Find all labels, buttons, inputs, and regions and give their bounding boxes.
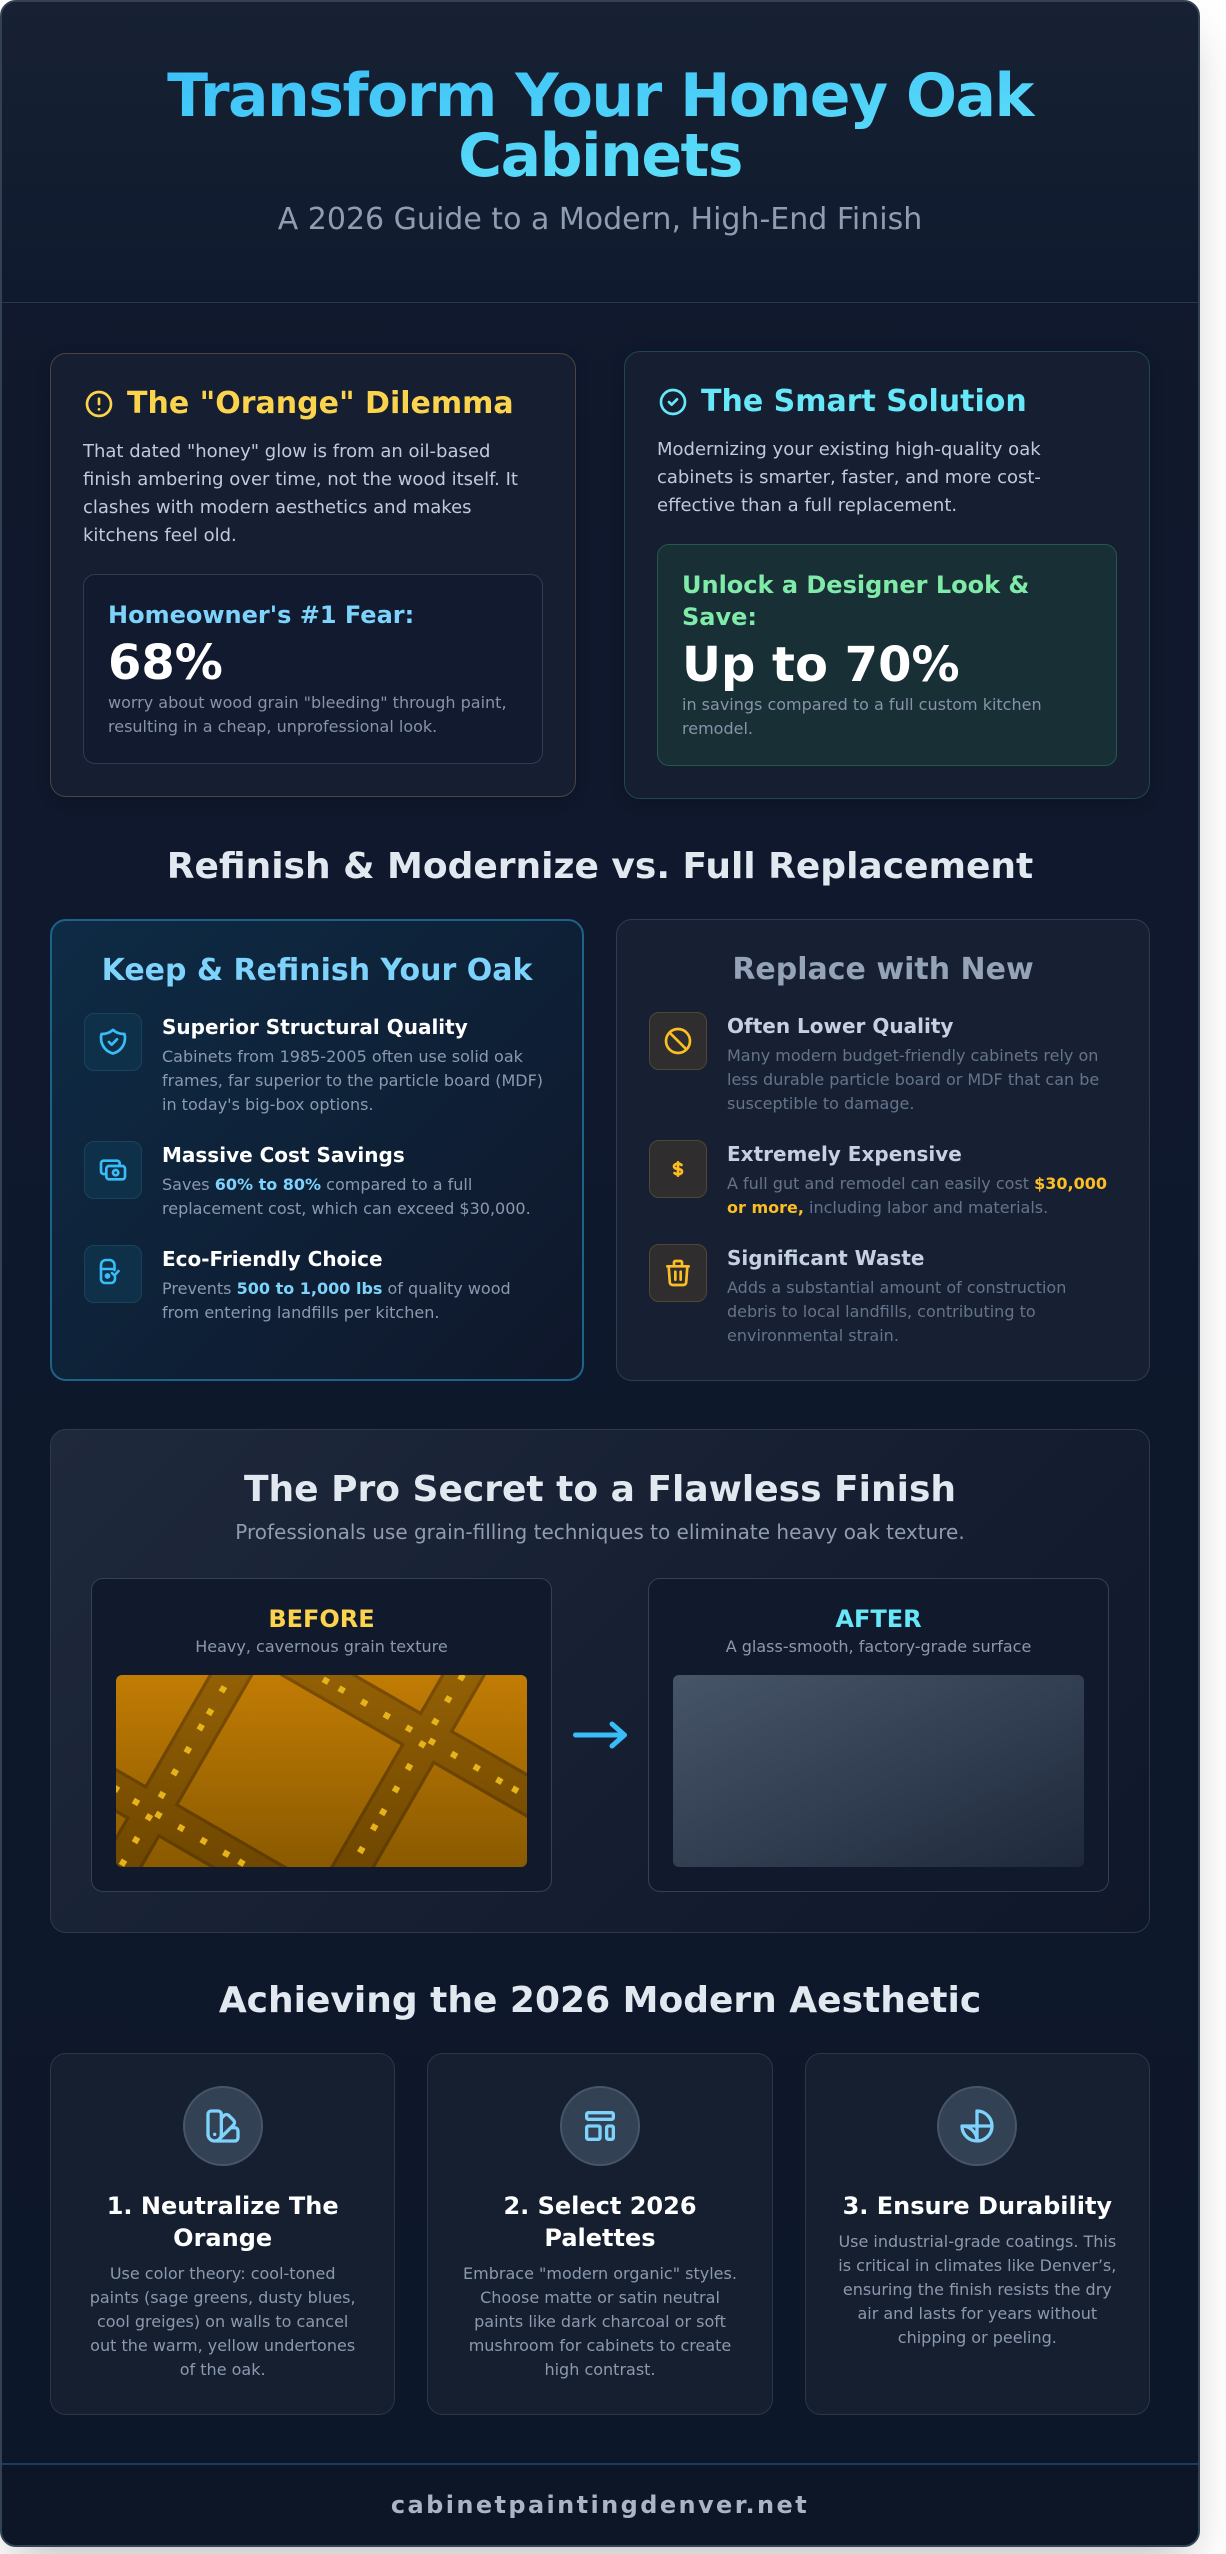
item: lower quality: Many modern budget-friendly cabinets rely on less durable particle board or MDF that can be susceptible to damage. [727,1046,1099,1113]
item: eco friendly [84,1245,511,1322]
title: Transform Your Honey Oak Cabinets [167,61,1033,191]
footer [2,2463,1198,2545]
subtitle: A 2026 Guide to a Modern, High-End Finish [278,202,922,237]
arrow: before to after [573,1722,627,1748]
panel: pro secret [50,1429,1150,1933]
caption: after: A glass-smooth, factory-grade surface [726,1637,1031,1656]
step text: Use industrial-grade coatings. This is critical in climates like Denver’s, ensuring the finish resists the dry air and lasts for years without chipping or peeling. [838,2232,1116,2347]
item: cost savings: Saves 60% to 80% compared to a full replacement cost, which can exceed $30,000. [162,1175,531,1218]
three step cards [50,2053,1150,2415]
panel: orange dilemma [50,353,576,797]
step text: Use color theory: cool-toned paints (sage greens, dusty blues, cool greiges) on walls to cancel out the warm, yellow undertones of the oak. [90,2264,356,2379]
footer: cabinetpaintingdenver.net [391,2491,809,2519]
item: expensive [649,1140,1107,1217]
item: eco friendly: Prevents 500 to 1,000 lbs of quality wood from entering landfills per kitchen. [162,1279,511,1322]
item: lower quality: Often Lower Quality [727,1014,953,1038]
icon: layout [560,2086,640,2166]
item: expensive: Extremely Expensive [727,1142,962,1166]
step text: Embrace "modern organic" styles. Choose matte or satin neutral paints like dark charcoal or soft mushroom for cabinets to create high contrast. [463,2264,737,2379]
card: durability [805,2053,1150,2415]
item: cost savings [84,1141,531,1218]
panel: before [91,1578,552,1892]
heading: modern aesthetic: Achieving the 2026 Modern Aesthetic [219,1980,981,2021]
callout: savings stat: in savings compared to a full custom kitchen remodel. [682,695,1042,738]
callout: homeowner fear stat [83,574,543,764]
item: lower quality [649,1012,1099,1113]
item: structural quality: Superior Structural Quality [162,1015,468,1039]
callout: homeowner fear stat: 68% [108,635,223,691]
before and after comparison [91,1578,1109,1892]
icon: swatch [183,2086,263,2166]
comparison panels [50,919,1150,1381]
label: before: BEFORE [268,1605,375,1633]
step title: 1. Neutralize The Orange [107,2192,339,2252]
panel: keep and refinish [50,919,584,1381]
heading: smart solution: The Smart Solution [701,384,1027,419]
panel heading: The Pro Secret to a Flawless Finish [244,1469,956,1510]
callout: savings stat: Unlock a Designer Look & Save: [682,571,1029,631]
item: waste [649,1244,1066,1345]
item: waste: Adds a substantial amount of construction debris to local landfills, contributing to environmental strain. [727,1278,1066,1345]
panel heading: Keep & Refinish Your Oak [102,953,532,988]
card: neutralize [50,2053,395,2415]
icon: shield leaf [937,2086,1017,2166]
panel heading: Replace with New [732,952,1034,987]
item: structural quality [84,1013,543,1114]
panel: smart solution [624,351,1150,799]
card: palettes [427,2053,773,2415]
label: after: AFTER [835,1605,922,1633]
panel: replace with new [616,919,1150,1381]
illustration: heavy oak grain [116,1675,527,1867]
item: structural quality: Cabinets from 1985-2005 often use solid oak frames, far superior to the particle board (MDF) in today's big-box options. [162,1047,543,1114]
heading: comparison: Refinish & Modernize vs. Full Replacement [167,846,1033,887]
heading: orange dilemma: The "Orange" Dilemma [127,386,514,421]
caption: before: Heavy, cavernous grain texture [195,1637,448,1656]
callout: savings stat [657,544,1117,766]
panel: after [648,1578,1109,1892]
illustration: smooth finish [673,1675,1084,1867]
panel subtitle: Professionals use grain-filling techniques to eliminate heavy oak texture. [235,1520,965,1544]
text: dilemma explanation: That dated "honey" glow is from an oil-based finish ambering over time, not the wood itself. It clashes with modern aesthetics and makes kitchens feel old. [83,441,518,546]
item: eco friendly: Eco-Friendly Choice [162,1247,383,1271]
callout: homeowner fear stat: Homeowner's #1 Fear: [108,601,414,629]
callout: savings stat: Up to 70% [682,637,960,693]
callout: homeowner fear stat: worry about wood grain "bleeding" through paint, resulting in a cheap, unprofessional look. [108,693,507,736]
problem and solution row [50,351,1150,799]
step title: 2. Select 2026 Palettes [503,2192,697,2252]
header [2,2,1198,303]
item: waste: Significant Waste [727,1246,924,1270]
item: expensive: A full gut and remodel can easily cost $30,000 or more, including labor and materials. [727,1174,1107,1217]
step title: 3. Ensure Durability [843,2192,1112,2220]
item: cost savings: Massive Cost Savings [162,1143,405,1167]
text: solution explanation: Modernizing your existing high-quality oak cabinets is smarter, faster, and more cost-effective than a full replacement. [657,439,1041,516]
